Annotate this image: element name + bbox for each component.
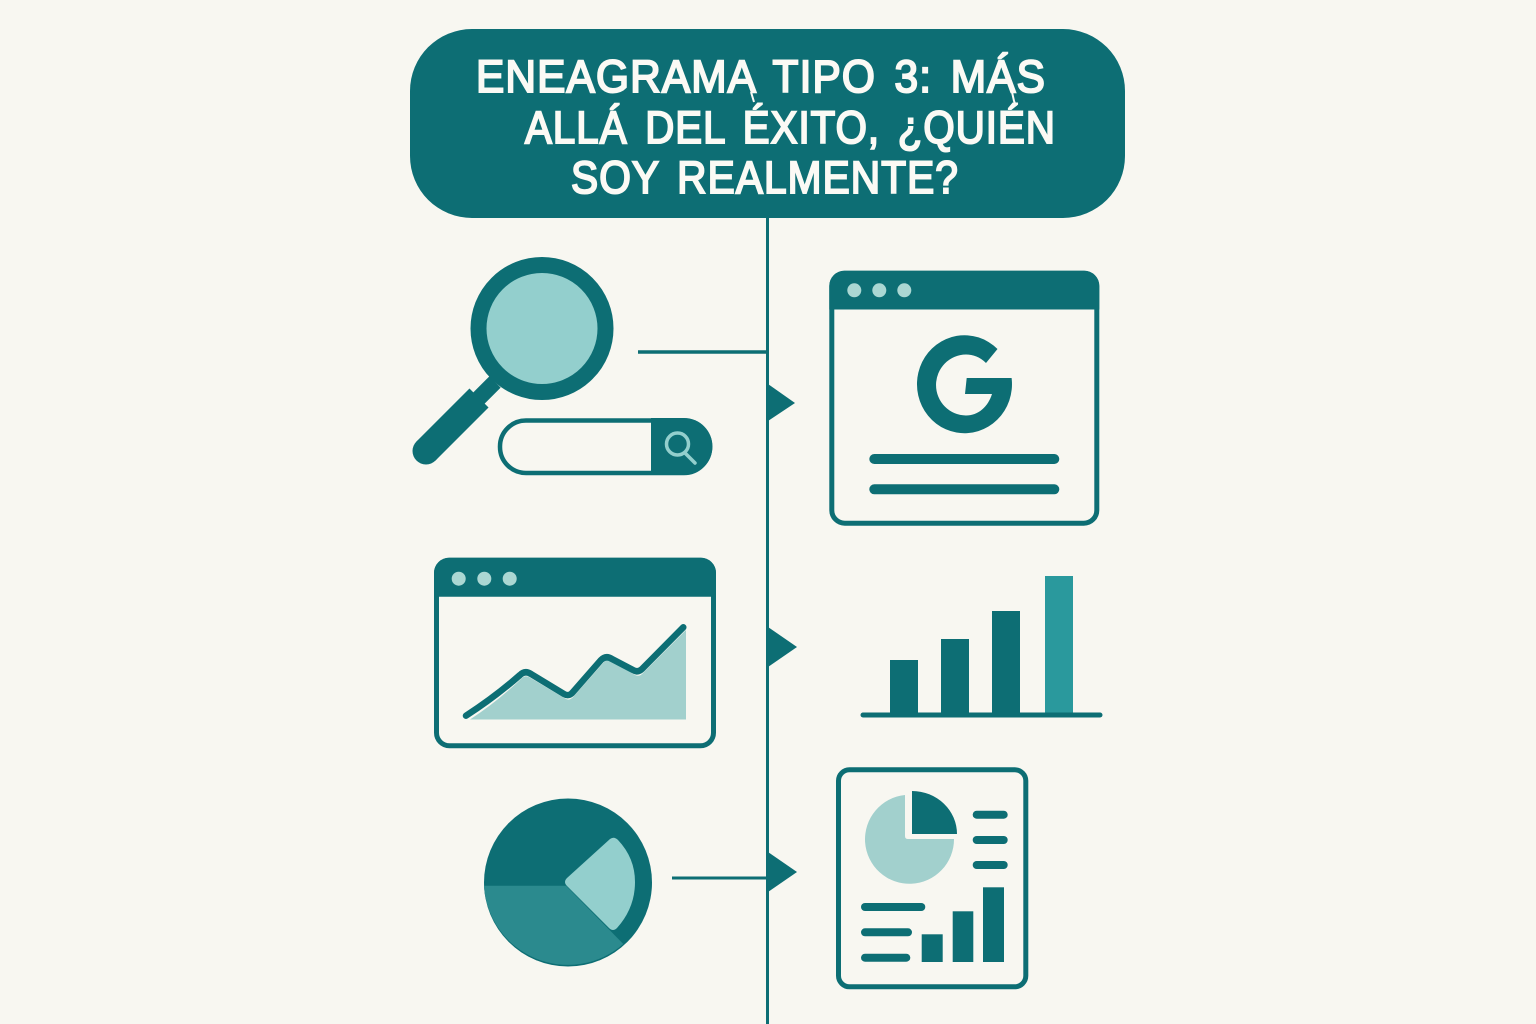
icon: pie chart xyxy=(484,798,652,966)
bar chart xyxy=(863,576,1100,715)
title banner: ALLÁ DEL ÉXITO, ¿QUIÉN xyxy=(525,102,1056,153)
connector: pie to dashboard xyxy=(672,876,767,880)
icon: magnifying glass xyxy=(412,265,606,464)
arrow: top xyxy=(768,384,795,421)
icon: report dashboard xyxy=(838,770,1026,987)
arrow: middle xyxy=(768,627,797,667)
icon: search bar xyxy=(500,418,712,475)
arrow: bottom xyxy=(768,852,797,892)
icon: line chart browser window xyxy=(434,558,716,746)
connector: search to browser xyxy=(638,350,767,354)
title banner xyxy=(410,29,1125,218)
title banner: SOY REALMENTE? xyxy=(571,152,959,203)
icon: search engine browser window xyxy=(829,271,1099,523)
title banner: ENEAGRAMA TIPO 3: MÁS xyxy=(476,51,1046,102)
